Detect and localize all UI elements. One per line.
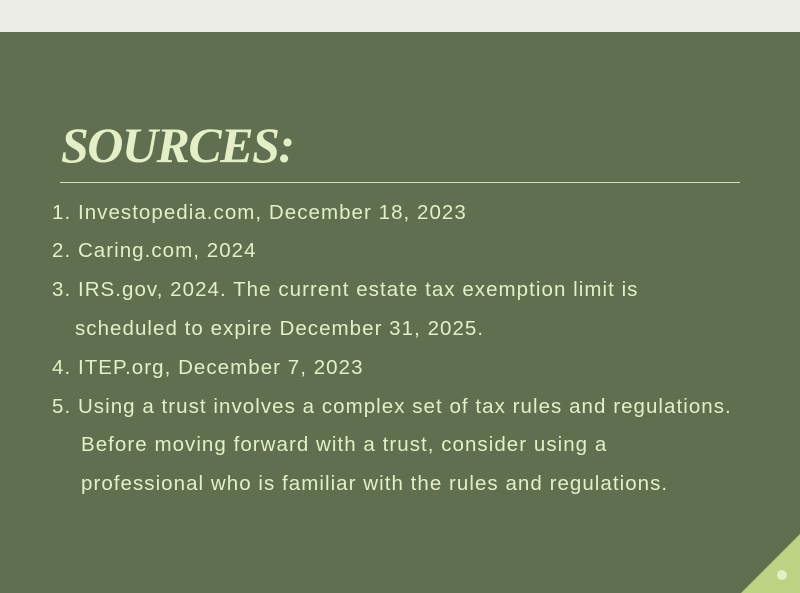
text: 4. ITEP.org, December 7, 2023 xyxy=(52,356,364,379)
sources list xyxy=(52,201,732,495)
text: professional who is familiar with the rules and regulations. xyxy=(81,472,668,495)
text: 3. IRS.gov, 2024. The current estate tax exemption limit is xyxy=(52,278,638,301)
text: scheduled to expire December 31, 2025. xyxy=(75,317,484,340)
text: 1. Investopedia.com, December 18, 2023 xyxy=(52,201,467,224)
title: SOURCES: xyxy=(61,117,294,173)
text: 5. Using a trust involves a complex set of tax rules and regulations. xyxy=(52,395,732,418)
text: 2. Caring.com, 2024 xyxy=(52,239,257,262)
text: Before moving forward with a trust, consider using a xyxy=(81,433,607,456)
